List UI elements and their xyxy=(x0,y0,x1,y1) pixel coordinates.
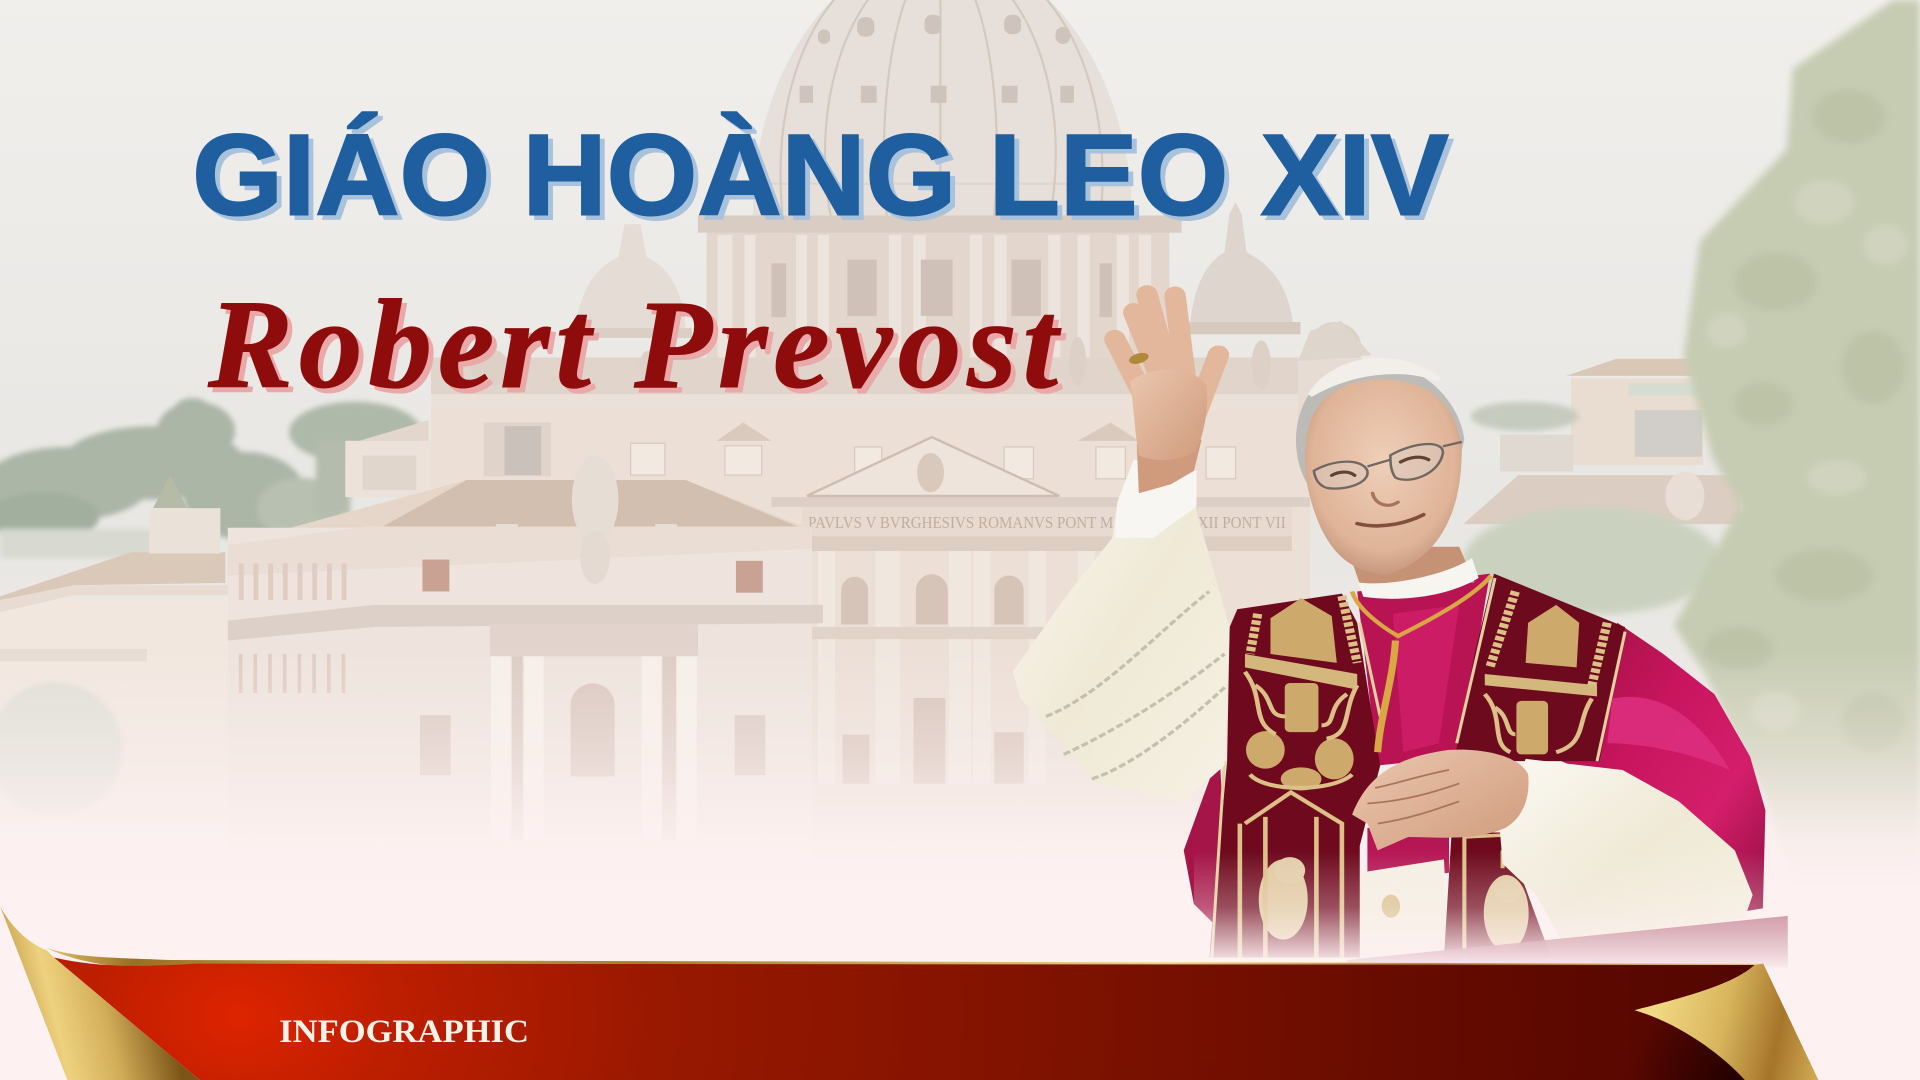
background photo: right buildings xyxy=(1298,321,1740,524)
figure: stole right xyxy=(1454,574,1625,761)
figure: hair xyxy=(1296,363,1464,482)
figure: finger lines xyxy=(1367,770,1459,824)
figure: gold embroidery xyxy=(1245,598,1597,951)
figure bottom fade xyxy=(1194,851,1794,964)
subtitle: Robert Prevost xyxy=(207,274,1062,415)
figure: left underside magenta xyxy=(1184,752,1230,940)
figure: face xyxy=(1305,379,1462,574)
figure: left sleeve xyxy=(1013,460,1230,801)
figure: gold cord xyxy=(1352,576,1491,752)
background fade to pink xyxy=(0,649,1920,888)
subtitle: Robert Prevost xyxy=(212,279,1066,420)
background photo: basilica facade xyxy=(431,322,1362,860)
figure: right sleeve xyxy=(1500,759,1753,958)
title: GIÁO HOÀNG LEO XIV xyxy=(192,111,1449,239)
figure: chest highlight xyxy=(1393,605,1459,752)
background lower blush xyxy=(0,887,1920,1080)
figure: white alb lower xyxy=(1360,859,1449,958)
figure: lower magenta xyxy=(1367,819,1449,882)
banner: gold top strip xyxy=(47,948,1763,973)
background photo: left wing palace xyxy=(203,456,823,858)
figure: gold trim and scrollwork xyxy=(1212,578,1625,958)
hand: palm xyxy=(1130,370,1207,460)
figure: magenta cape xyxy=(1561,623,1765,913)
red ribbon banner xyxy=(0,906,1818,1080)
banner: gold edge line xyxy=(159,965,1751,967)
figure: stole left xyxy=(1209,594,1380,958)
background photo: right distant tree xyxy=(1463,507,1720,615)
hand: fingers xyxy=(1115,295,1218,413)
figure: pectoral pendant xyxy=(1382,895,1400,918)
figure: zucchetto xyxy=(1310,360,1439,395)
banner label: INFOGRAPHIC xyxy=(279,1014,529,1050)
banner: right gold fold xyxy=(1635,964,1818,1080)
figure: neck xyxy=(1347,547,1475,591)
balcony ledge xyxy=(1347,916,1788,967)
background photo: left trees xyxy=(0,398,421,558)
background photo: side annex xyxy=(345,420,431,497)
figure: white collar xyxy=(1358,558,1479,599)
facade: rooftop statues xyxy=(470,322,1362,389)
figure: cape highlight xyxy=(1607,697,1730,770)
banner: red body xyxy=(54,958,1755,1080)
dome drum xyxy=(707,225,1169,358)
background photo: far left buildings xyxy=(0,475,228,820)
figure: central chest xyxy=(1357,574,1490,766)
background photo: side domes xyxy=(569,202,1300,338)
banner: corner shade xyxy=(1592,1004,1745,1080)
background photo: Saint Peter's dome xyxy=(698,0,1182,358)
figure: sleeve cuff xyxy=(1115,460,1196,538)
figure: hand on chest xyxy=(1352,750,1529,850)
figure: raised hand xyxy=(1115,295,1218,460)
background photo: large tree on the right xyxy=(1674,0,1920,906)
figure: raised wrist xyxy=(1137,440,1202,493)
figure: stole lower right xyxy=(1444,833,1551,958)
figure: sleeve embroidery xyxy=(1046,591,1227,779)
figure: glasses xyxy=(1314,442,1462,489)
banner: left gold fold xyxy=(0,906,200,1080)
figure: eyes, nose and mouth xyxy=(1332,457,1429,526)
figure: ring xyxy=(1127,351,1150,366)
pope figure xyxy=(1013,295,1765,958)
background photo: basilica facade: PAVLVS V BVRGHESIVS ROMANVS PONT MAX AN MDCXII PONT VII xyxy=(808,513,1286,532)
title: GIÁO HOÀNG LEO XIV xyxy=(197,116,1453,244)
